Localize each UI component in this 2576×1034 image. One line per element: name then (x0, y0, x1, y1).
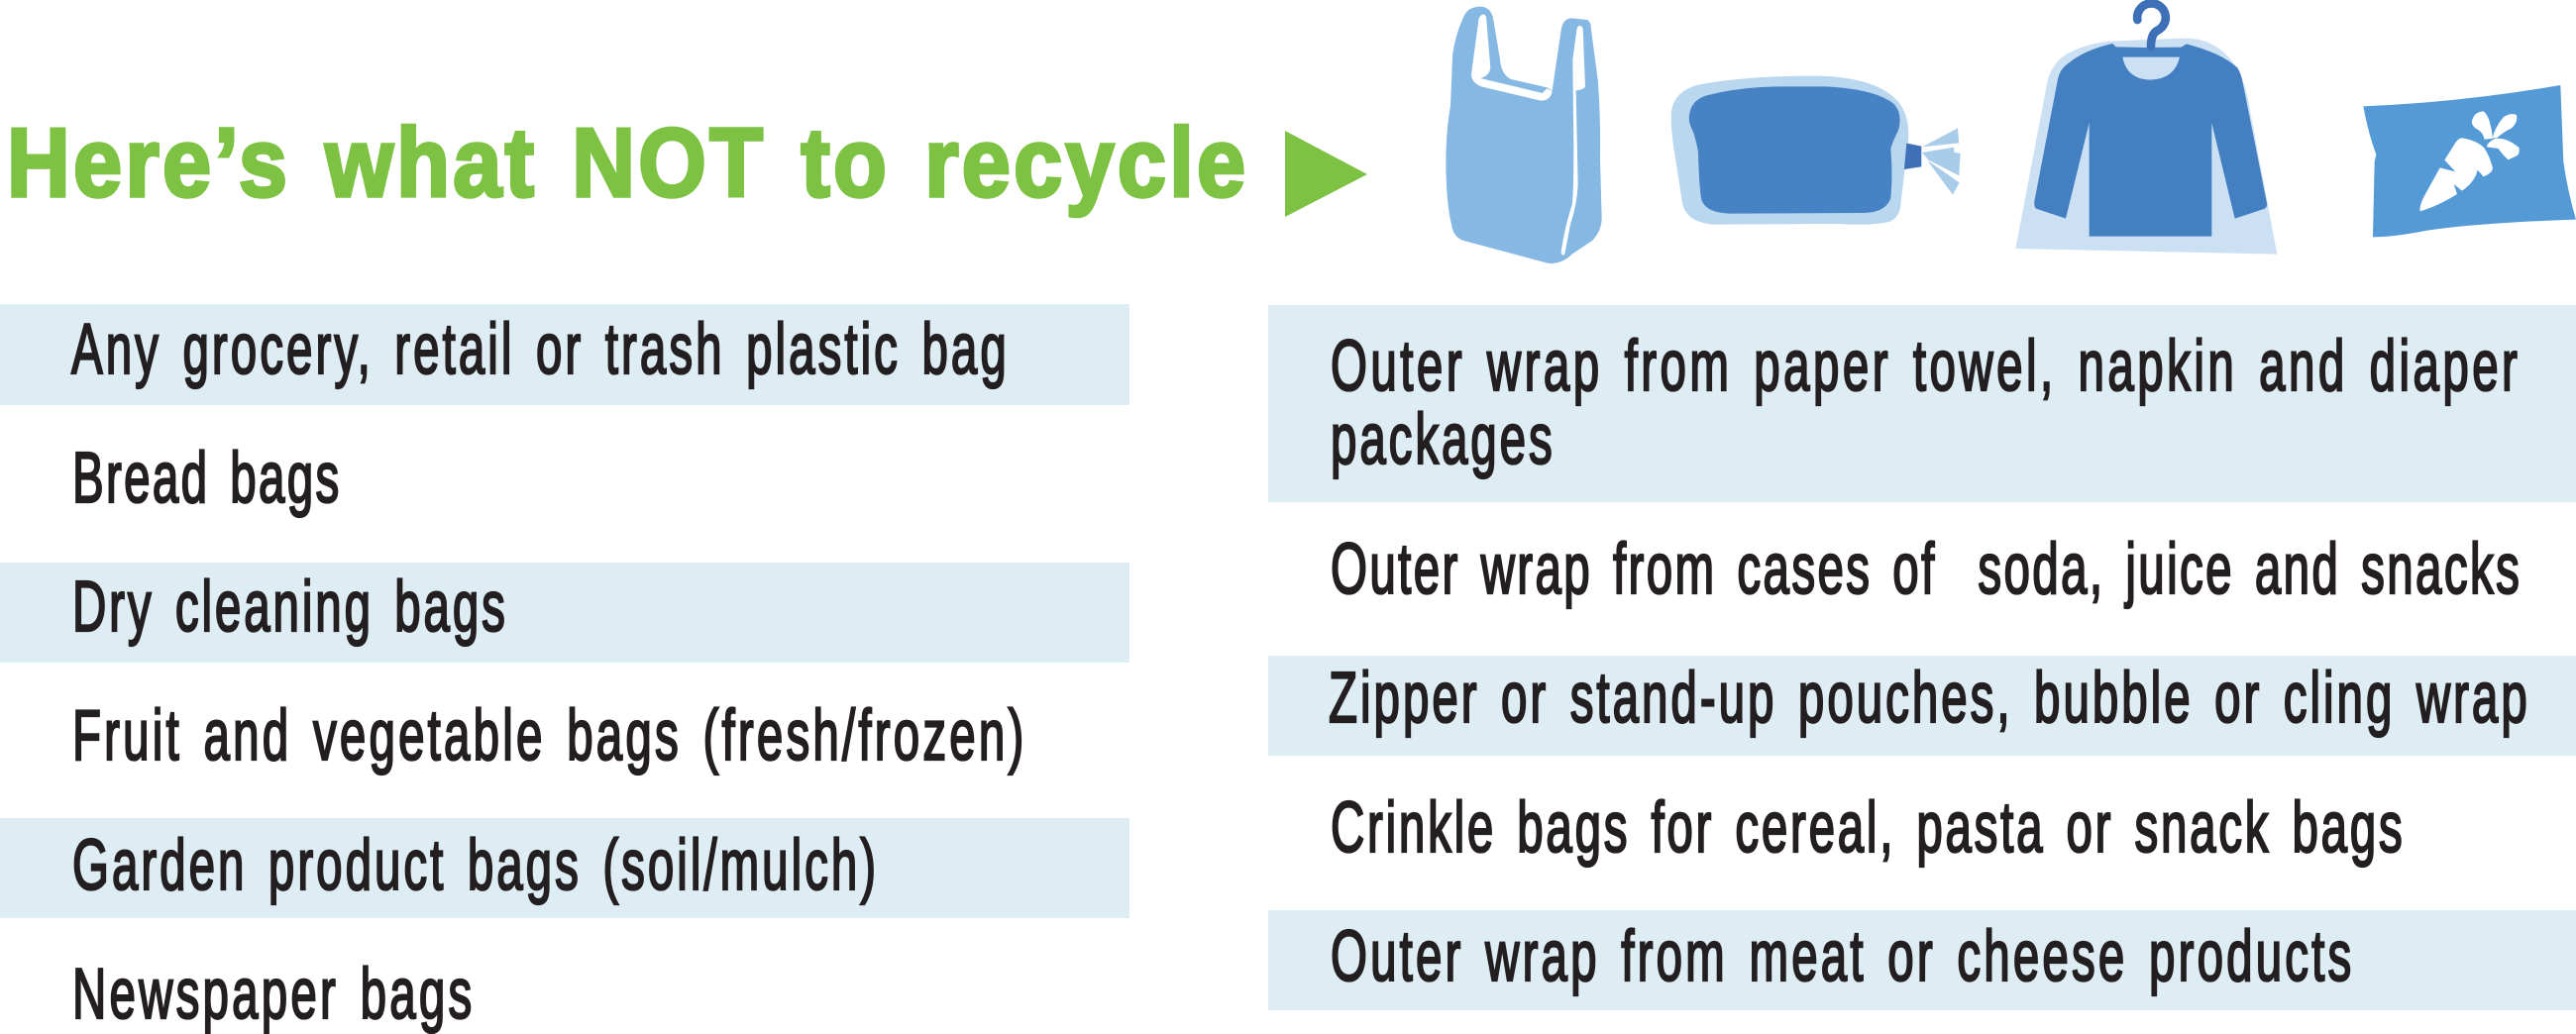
row: garden product bags (0, 818, 1129, 918)
row: crinkle bags: Crinkle bags for cereal, pasta or snack bags (1331, 787, 2403, 867)
row: newspaper bags: Newspaper bags (72, 954, 472, 1033)
row: outer wrap from paper goods: Outer wrap from paper towel, napkin and diaper (1331, 326, 2518, 405)
panel: left list (0, 304, 1129, 1033)
row: grocery bags (0, 304, 1129, 405)
row: dry cleaning bags (0, 563, 1129, 663)
icon: bread bag (1671, 76, 1961, 225)
arrow (1285, 131, 1367, 217)
row: meat or cheese wrap: Outer wrap from meat or cheese products (1331, 916, 2351, 995)
row: grocery bags: Any grocery, retail or trash plastic bag (71, 309, 1007, 388)
title: Here’s what NOT to recycle (7, 109, 1245, 217)
panel: right list (1268, 305, 2576, 1010)
row: outer wrap from paper goods (1268, 305, 2576, 502)
row: bread bags: Bread bags (72, 438, 339, 517)
icon: frozen vegetable pouch with carrot (2363, 85, 2576, 237)
row: garden product bags: Garden product bags (soil/mulch) (72, 825, 876, 904)
row: outer wrap from cases: Outer wrap from cases of soda, juice and snacks (1331, 529, 2520, 608)
row: outer wrap from paper goods: packages (1331, 399, 1553, 478)
row: zipper pouches: Zipper or stand-up pouches, bubble or cling wrap (1329, 658, 2527, 737)
row: meat or cheese wrap (1268, 910, 2576, 1010)
icon: dry cleaning shirt on hanger (2015, 3, 2277, 255)
icon: plastic grocery bag (1446, 7, 1602, 263)
row: dry cleaning bags: Dry cleaning bags (72, 567, 505, 646)
row: fruit and vegetable bags: Fruit and vegetable bags (fresh/frozen) (72, 695, 1023, 775)
